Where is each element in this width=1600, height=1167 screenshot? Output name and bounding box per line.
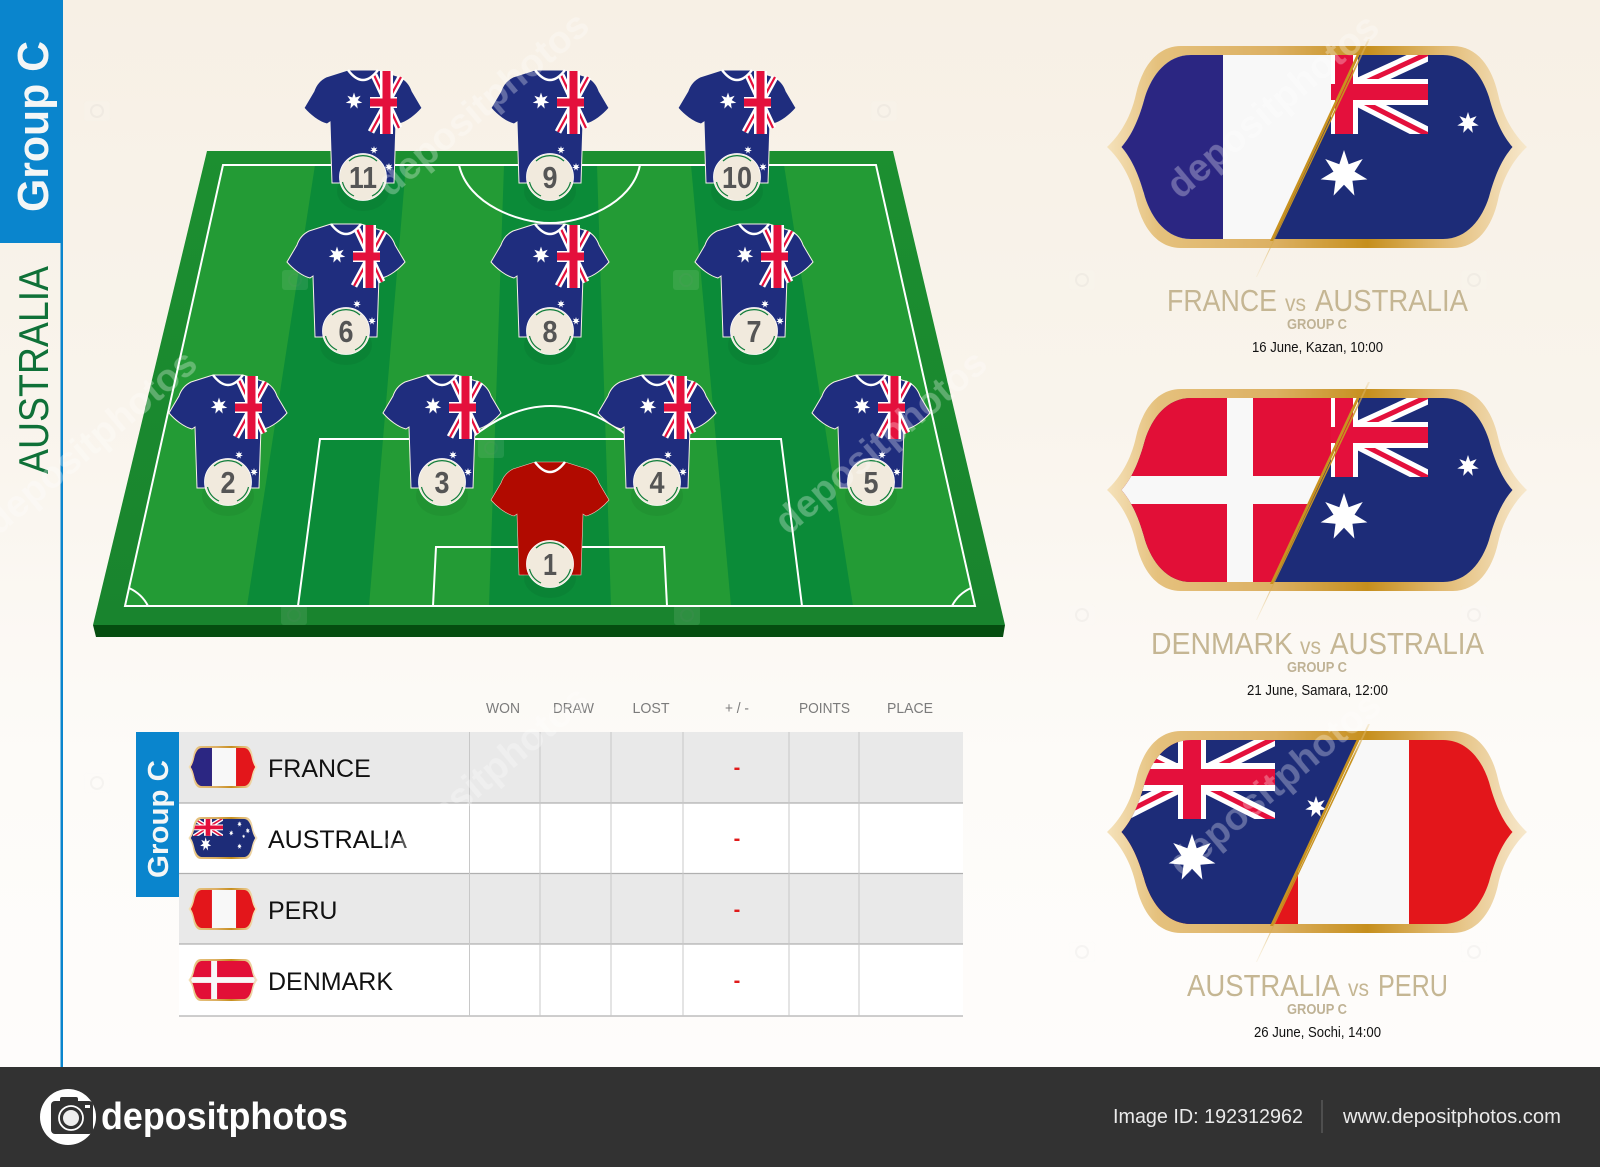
group label (136, 732, 179, 897)
footer bar (0, 1067, 1600, 1167)
football pitch (93, 151, 1005, 637)
jersey: 7 (695, 224, 813, 365)
faint camera watermarks (84, 101, 1487, 962)
watermarks: depositphotos (369, 678, 597, 879)
sidebar: group and team (0, 0, 63, 1067)
sidebar: group and team: Group C (9, 41, 58, 212)
website: www.depositphotos.com (1342, 1106, 1561, 1128)
watermarks: depositphotos (369, 4, 597, 205)
caption: Australia vs Peru: GROUP C (1287, 1002, 1347, 1018)
result dashes: - (734, 828, 740, 850)
jersey: 11 (304, 70, 422, 211)
group label: Group C (143, 760, 175, 878)
caption: France vs Australia: vs (1285, 290, 1306, 316)
result dashes (734, 757, 740, 992)
watermarks: depositphotos (1161, 684, 1389, 885)
logo wordmark: depositphotos (101, 1096, 348, 1138)
caption: Denmark vs Australia: AUSTRALIA (1330, 626, 1484, 661)
table headers: WON (486, 700, 520, 717)
jersey: 4 (598, 375, 716, 516)
jersey: 5: 5 (864, 465, 878, 500)
row: France: FRANCE (268, 755, 371, 783)
jersey: 9 (491, 70, 609, 211)
watermarks: depositphotos (1159, 6, 1387, 207)
table headers: + / - (725, 700, 749, 717)
row: Peru (187, 888, 337, 930)
caption: Australia vs Peru: PERU (1378, 968, 1448, 1003)
caption: France vs Australia: GROUP C (1287, 317, 1347, 333)
table headers: PLACE (887, 700, 933, 717)
table headers: LOST (632, 700, 670, 717)
jersey: 9: 9 (542, 160, 558, 195)
caption: Denmark vs Australia: DENMARK (1151, 626, 1293, 661)
table headers: POINTS (799, 700, 850, 717)
jersey: 10 (678, 70, 796, 211)
caption: France vs Australia: FRANCE (1167, 283, 1277, 318)
caption: Australia vs Peru: AUSTRALIA (1187, 968, 1340, 1003)
caption: Denmark vs Australia: 21 June, Samara, 12:00 (1247, 683, 1388, 699)
jersey: 2: 2 (220, 465, 236, 500)
caption: France vs Australia (1167, 283, 1468, 356)
jersey: goalkeeper 1 (491, 462, 609, 598)
jersey: 4: 4 (650, 465, 665, 500)
row: Australia (187, 817, 407, 859)
jersey: 6 (287, 224, 405, 365)
jersey: 2 (169, 375, 287, 516)
caption: Australia vs Peru: vs (1348, 975, 1369, 1001)
match badge: Australia vs Peru (1097, 724, 1537, 962)
caption: Denmark vs Australia: vs (1300, 633, 1321, 659)
watermarks: depositphotos (767, 342, 995, 543)
row: Australia: AUSTRALIA (268, 826, 407, 854)
jersey: 3 (383, 375, 501, 516)
jersey: 6: 6 (338, 314, 354, 349)
jersey: 8 (491, 224, 609, 365)
sidebar: group and team: AUSTRALIA (10, 266, 57, 474)
icon: camera logo (40, 1089, 96, 1145)
result dashes: - (734, 899, 740, 921)
jersey: goalkeeper 1: 1 (543, 547, 557, 582)
image id: Image ID: 192312962 (1113, 1106, 1303, 1128)
match badge: France vs Australia (1097, 39, 1537, 277)
caption: Australia vs Peru (1187, 968, 1448, 1041)
caption: Denmark vs Australia (1151, 626, 1484, 699)
caption: France vs Australia: 16 June, Kazan, 10:00 (1252, 340, 1383, 356)
jersey: 3: 3 (434, 465, 450, 500)
row: France (187, 746, 371, 788)
caption: Australia vs Peru: 26 June, Sochi, 14:00 (1254, 1025, 1381, 1041)
watermarks (0, 4, 1389, 885)
jersey: 10: 10 (722, 160, 752, 195)
row: Denmark: DENMARK (268, 968, 393, 996)
caption: France vs Australia: AUSTRALIA (1315, 283, 1468, 318)
jersey: 11: 11 (349, 160, 377, 195)
table headers (486, 700, 933, 717)
match badge: Denmark vs Australia (1097, 382, 1537, 620)
jersey: 8: 8 (542, 314, 558, 349)
result dashes: - (734, 970, 740, 992)
jersey: 5 (812, 375, 930, 516)
jersey: 7: 7 (746, 314, 762, 349)
table headers: DRAW (553, 700, 595, 717)
row: Denmark (187, 959, 393, 1001)
group table (136, 732, 963, 1016)
caption: Denmark vs Australia: GROUP C (1287, 660, 1347, 676)
result dashes: - (734, 757, 740, 779)
row: Peru: PERU (268, 897, 337, 925)
